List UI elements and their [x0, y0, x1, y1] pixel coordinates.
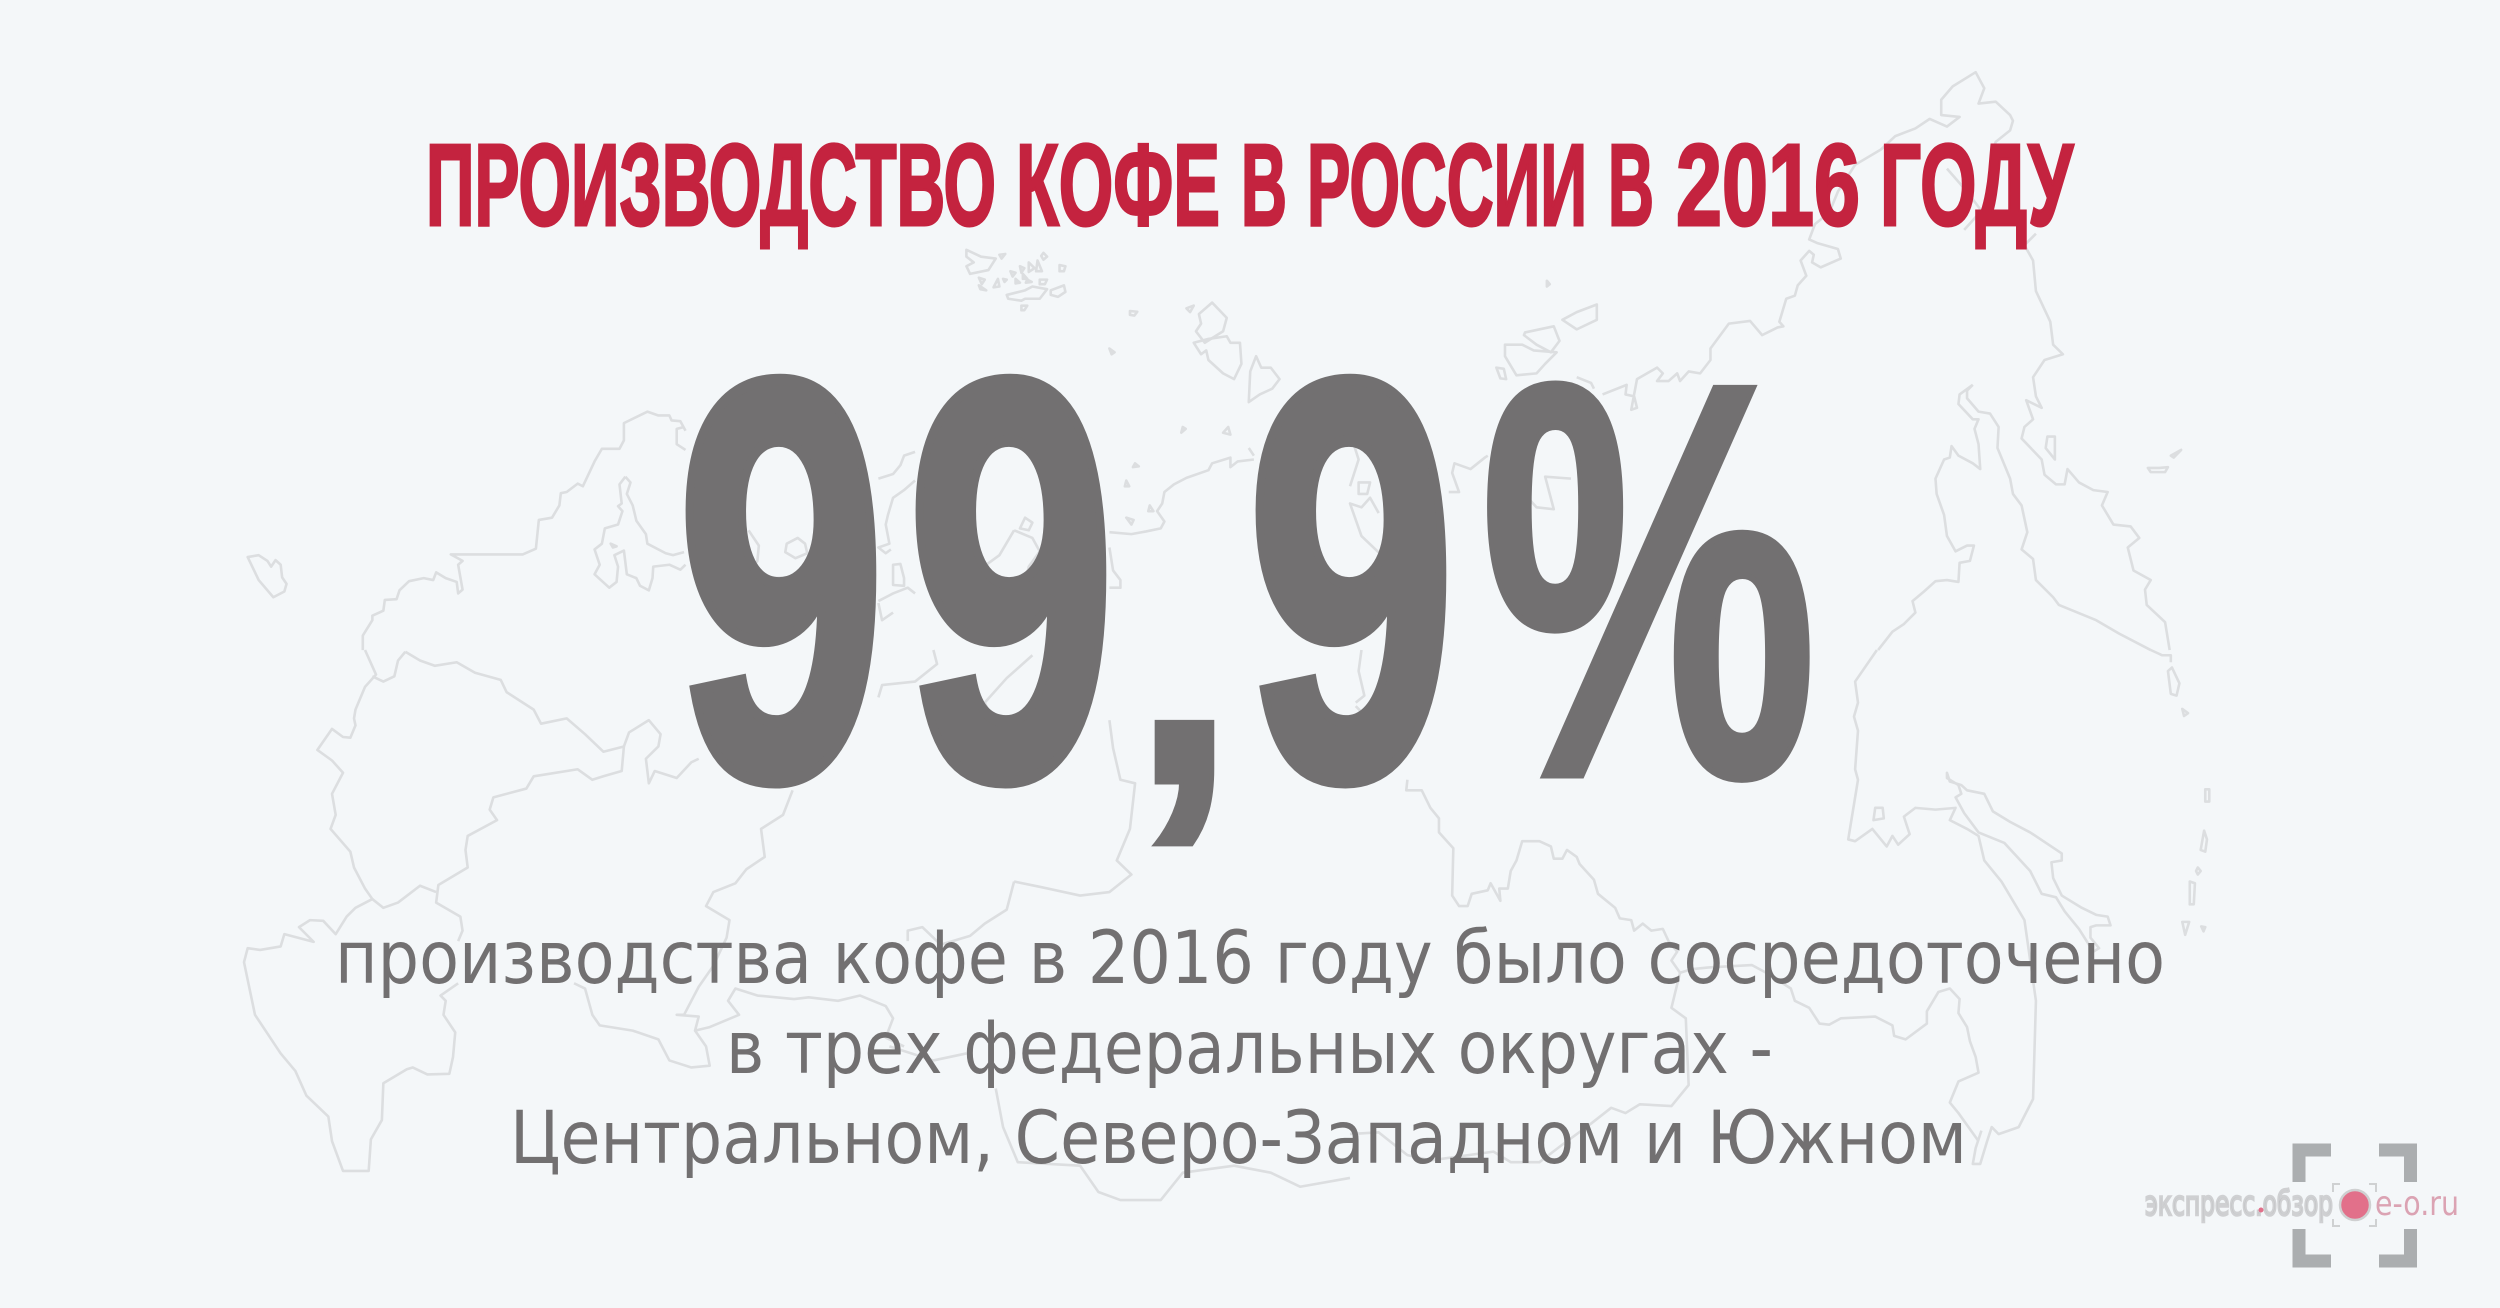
big number 99,9%: %	[1480, 266, 1817, 895]
description text	[335, 916, 2165, 1181]
title: КОФЕ	[1016, 120, 1220, 250]
logo	[2145, 1150, 2459, 1261]
big number 99,9%	[676, 263, 1817, 898]
map of Russia outline	[244, 72, 2209, 1200]
icon: small viewfinder corners	[2333, 1184, 2376, 1226]
title: В	[1608, 120, 1654, 250]
big number 99,9%: 9	[1246, 263, 1456, 898]
description text: Центральном, Северо-Западном и Южном	[510, 1096, 1967, 1181]
title: В	[1241, 120, 1287, 250]
logo text: экспресс.обзор	[2145, 1184, 2333, 1224]
logo small dot	[2258, 1208, 2264, 1212]
logo domain: e-o.ru	[2375, 1184, 2459, 1224]
big number 99,9%: 9	[676, 263, 886, 898]
title: 2016	[1676, 120, 1860, 250]
big number 99,9%: ,	[1130, 420, 1238, 867]
icon: viewfinder corners	[2299, 1150, 2410, 1261]
big number 99,9%: 9	[906, 263, 1116, 898]
title: ПРОИЗВОДСТВО	[426, 120, 996, 250]
description text: производства кофе в 2016 году было сосредоточено	[335, 916, 2165, 1001]
title: РОССИИ	[1307, 120, 1587, 250]
title	[426, 120, 2074, 250]
description text: в трех федеральных округах -	[726, 1006, 1773, 1091]
icon: red dot	[2340, 1190, 2370, 1220]
title: ГОДУ	[1880, 120, 2074, 250]
